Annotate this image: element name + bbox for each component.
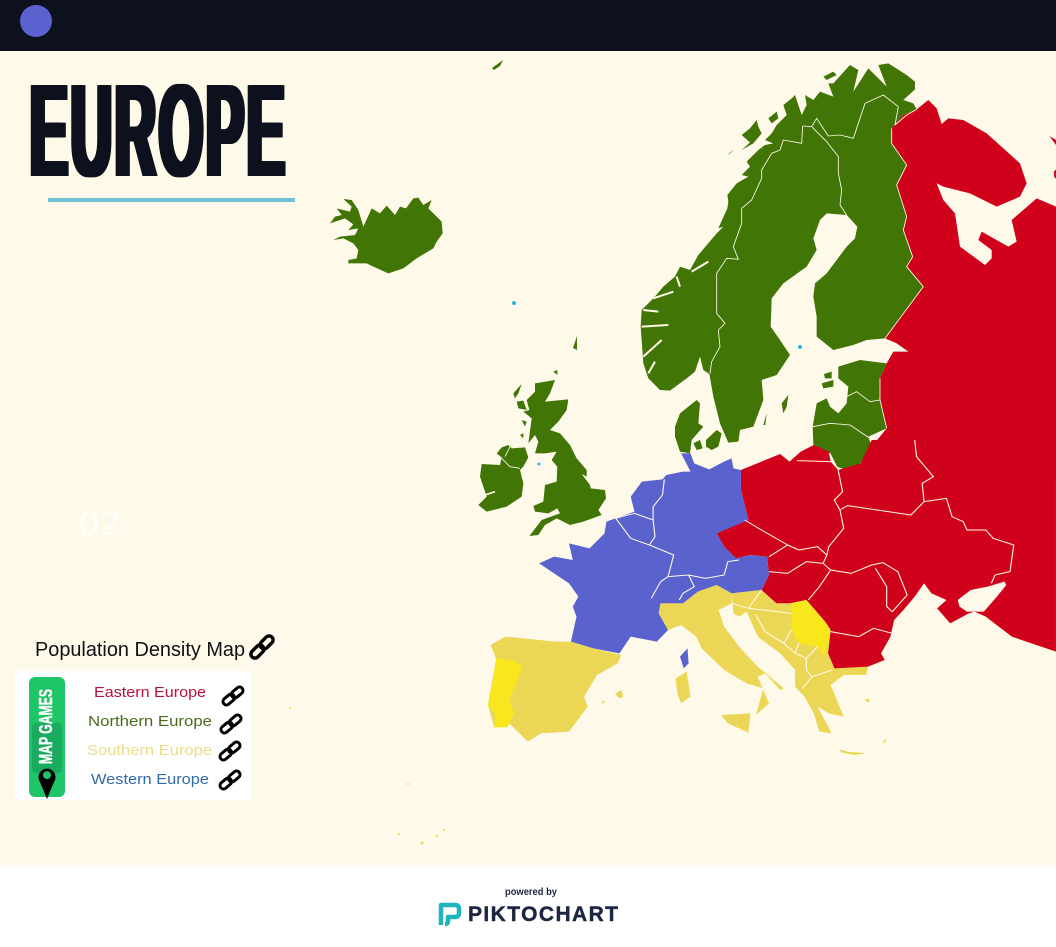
Portugal	[488, 658, 522, 727]
title underline	[48, 198, 295, 202]
eastern block	[717, 440, 1056, 670]
icon: heading link	[249, 634, 275, 660]
powered by: powered by	[505, 886, 557, 898]
Svalbard fragment and Shetland bits	[492, 60, 577, 350]
legend: Eastern Europe: Eastern Europe	[94, 684, 206, 701]
Scandinavian and Baltic borders	[710, 95, 923, 467]
faint number: 02	[79, 505, 120, 543]
Iceland	[330, 198, 443, 273]
central and southern regions	[488, 440, 1056, 755]
legend: Southern Europe: Southern Europe	[87, 742, 212, 759]
sea of Azov	[958, 582, 1006, 612]
map games badge	[29, 677, 65, 799]
icon: link 3	[219, 741, 241, 761]
Serbia	[791, 600, 831, 657]
title: EUROPE	[30, 57, 287, 204]
fjord notches	[642, 262, 708, 373]
northern region: Scandinavia, Baltics	[641, 63, 923, 470]
borders	[616, 440, 1014, 688]
icon: link 1	[222, 686, 244, 706]
top bar	[0, 0, 1056, 51]
legend heading: Population Density Map	[35, 639, 245, 661]
Britain and Ireland	[478, 370, 606, 536]
Italy, Balkans, Iberia	[488, 585, 887, 755]
eastern region: Russia	[860, 100, 1056, 483]
icon: link 2	[220, 714, 242, 734]
piktochart wordmark: PIKTOCHART	[468, 903, 618, 926]
map of Europe	[289, 60, 1056, 844]
map games badge: MAP GAMES	[36, 689, 56, 764]
legend panel	[15, 671, 251, 800]
icon: link 4	[219, 770, 241, 790]
western block	[539, 453, 769, 653]
footer	[0, 867, 1056, 947]
legend: Western Europe: Western Europe	[91, 771, 209, 788]
legend: Northern Europe: Northern Europe	[88, 713, 212, 730]
icon: piktochart logo	[441, 905, 459, 925]
small islands and lake dots	[289, 301, 802, 844]
